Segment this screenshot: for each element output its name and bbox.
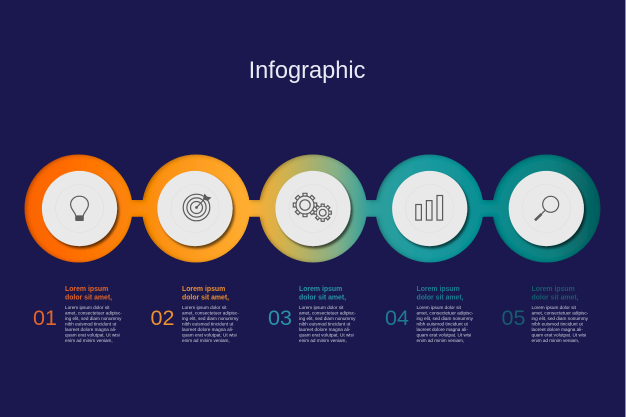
step 1 text: Lorem ipsum dolor sit bbox=[65, 305, 110, 310]
step 5 text: Lorem ipsum bbox=[532, 286, 575, 293]
step 4 text bbox=[385, 286, 474, 343]
step 5 text: dolor sit amet, bbox=[532, 294, 579, 301]
icon: bar chart bbox=[416, 196, 443, 220]
step 1 text: Lorem ipsum bbox=[65, 286, 108, 293]
step 5 text: 05 bbox=[502, 306, 525, 330]
step 3 text: quam erat volutpat. Ut wisi bbox=[299, 332, 354, 338]
gradient chain of five rings bbox=[24, 154, 600, 262]
step 3 text: amet, consectetuer adipisc- bbox=[299, 310, 356, 316]
step 2 text: quam erat volutpat. Ut wisi bbox=[182, 332, 237, 338]
step 3 text: Lorem ipsum bbox=[299, 286, 342, 293]
step 3 text: ing elit, sed diam nonummy bbox=[299, 316, 356, 321]
step 1 text: enim ad minim veniam, bbox=[65, 338, 113, 343]
step 1 text: 01 bbox=[33, 306, 57, 330]
step 5 text: laoreet dolore magna ali- bbox=[532, 327, 583, 332]
step 1 text: dolor sit amet, bbox=[65, 294, 112, 301]
step 2 text: amet, consectetuer adipisc- bbox=[182, 310, 239, 316]
step 2 text: Lorem ipsum bbox=[182, 286, 225, 293]
step 3 text: laoreet dolore magna ali- bbox=[299, 327, 351, 332]
step 4 text: 04 bbox=[385, 306, 409, 330]
icon: magnifier bbox=[535, 196, 559, 220]
step 5 disc with magnifier icon bbox=[509, 171, 584, 246]
step 1 text: quam erat volutpat. Ut wisi bbox=[65, 332, 120, 338]
title: Infographic bbox=[249, 58, 366, 84]
step 4 text: Lorem ipsum bbox=[416, 286, 460, 293]
step 1 text: ing elit, sed diam nonummy bbox=[65, 316, 122, 321]
right edge line bbox=[625, 0, 626, 417]
step 1 text: nibh euismod tincidunt ut bbox=[65, 322, 117, 326]
step 4 text: amet, consectetuer adipisc- bbox=[416, 310, 474, 316]
icon: lightbulb bbox=[71, 196, 88, 221]
step 4 text: laoreet dolore magna ali- bbox=[416, 327, 468, 332]
step 4 text: enim ad minim veniam, bbox=[416, 338, 464, 343]
step 4 disc with bar chart icon bbox=[392, 171, 467, 246]
step 3 text: enim ad minim veniam, bbox=[299, 338, 347, 343]
step 4 text: ing elit, sed diam nonummy bbox=[416, 316, 474, 321]
step 5 text: amet, consectetuer adipisc- bbox=[532, 310, 589, 316]
step 1 text bbox=[33, 286, 122, 343]
step 3 text: nibh euismod tincidunt ut bbox=[299, 322, 351, 326]
step 2 text: laoreet dolore magna ali- bbox=[182, 327, 234, 332]
icon: target bbox=[183, 194, 212, 221]
step 2 text: dolor sit amet, bbox=[182, 294, 229, 301]
step 1 text: laoreet dolore magna ali- bbox=[65, 327, 117, 332]
step 3 text: dolor sit amet, bbox=[299, 294, 346, 301]
step 2 text: Lorem ipsum dolor sit bbox=[182, 305, 227, 310]
step 4 text: Lorem ipsum dolor sit bbox=[416, 305, 462, 310]
step 5 text: Lorem ipsum dolor sit bbox=[532, 305, 577, 310]
step 2 text: ing elit, sed diam nonummy bbox=[182, 316, 239, 321]
step 5 text: quam erat volutpat. Ut wisi bbox=[532, 332, 586, 338]
step 3 text: 03 bbox=[268, 306, 292, 330]
step 5 text: enim ad minim veniam, bbox=[532, 338, 579, 343]
step 3 text: Lorem ipsum dolor sit bbox=[299, 305, 344, 310]
step 2 text: 02 bbox=[150, 306, 174, 330]
step 5 text bbox=[502, 286, 589, 343]
step 3 disc with gears icon bbox=[275, 171, 351, 246]
step 2 text: nibh euismod tincidunt ut bbox=[182, 322, 234, 326]
step 4 text: nibh euismod tincidunt ut bbox=[416, 322, 469, 326]
step 4 text: quam erat volutpat. Ut wisi bbox=[416, 332, 471, 338]
icon: gears bbox=[293, 193, 331, 221]
step 1 disc with lightbulb icon bbox=[42, 171, 117, 246]
step 2 text bbox=[150, 286, 239, 343]
step 2 text: enim ad minim veniam, bbox=[182, 338, 230, 343]
step 1 text: amet, consectetuer adipisc- bbox=[65, 310, 122, 316]
step 5 text: nibh euismod tincidunt ut bbox=[532, 322, 584, 326]
step 3 text bbox=[268, 286, 356, 343]
step 5 text: ing elit, sed diam nonummy bbox=[532, 316, 589, 321]
step 4 text: dolor sit amet, bbox=[416, 294, 464, 301]
step 2 disc with target icon bbox=[157, 171, 233, 246]
